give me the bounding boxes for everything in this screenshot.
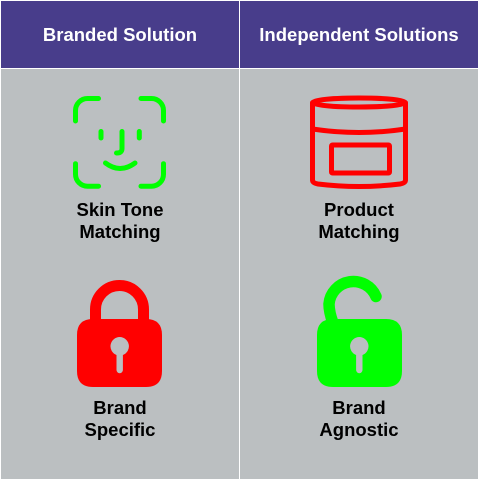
label: Brand Specific: Brand [93,397,147,418]
panel: independent column [240,69,478,479]
header: Independent Solutions [240,1,478,68]
label: Brand Agnostic [319,397,399,440]
header: Branded Solution [1,1,239,68]
label: Brand Specific [85,397,155,440]
label: Product Matching: Product [324,199,394,220]
label: Brand Agnostic: Brand [332,397,386,418]
panel: branded column [1,69,239,479]
label: Product Matching [318,199,400,242]
header: Branded Solution: Branded Solution [43,24,197,45]
label: Skin Tone Matching: Skin Tone [76,199,164,220]
label: Brand Specific: Specific [85,419,155,440]
label: Product Matching: Matching [318,221,400,242]
label: Skin Tone Matching [76,199,164,242]
label: Brand Agnostic: Agnostic [319,419,399,440]
label: Skin Tone Matching: Matching [79,221,161,242]
header: Independent Solutions: Independent Solutions [259,24,459,45]
